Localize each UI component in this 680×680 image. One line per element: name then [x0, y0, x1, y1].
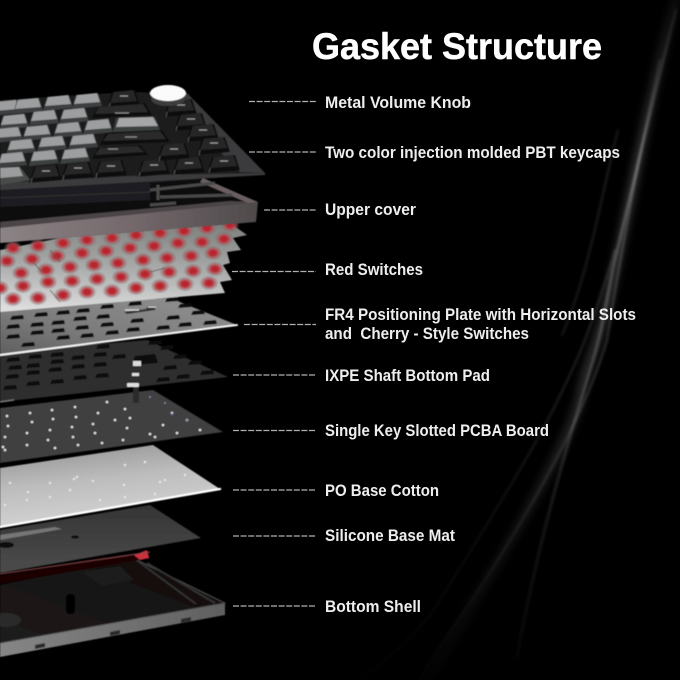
label: bottom shell: Bottom Shell: [325, 598, 421, 616]
layer: silicone base mat: [0, 505, 201, 584]
label: PCBA board: Single Key Slotted PCBA Board: [325, 422, 549, 440]
decorative smoke wisps: [360, 0, 676, 680]
layer: bottom shell: [0, 558, 225, 657]
label: metal volume knob: Metal Volume Knob: [325, 94, 471, 112]
label: FR4 positioning plate: [244, 306, 636, 343]
label: upper cover: Upper cover: [325, 201, 417, 219]
callout labels: [232, 94, 636, 616]
layer: PCBA board: [0, 390, 223, 463]
keys: grey alphas: [0, 93, 160, 185]
label: IXPE pad: IXPE Shaft Bottom Pad: [325, 367, 490, 385]
layer: keycaps and keyboard body: [0, 85, 265, 207]
label: red switches: Red Switches: [325, 261, 423, 279]
layer: IXPE pad: [0, 340, 228, 403]
label: silicone base mat: Silicone Base Mat: [325, 527, 455, 545]
icon: metal volume knob: [150, 85, 186, 106]
layer: upper cover: [0, 178, 258, 243]
label: FR4 positioning plate: and Cherry - Style Switches: [325, 325, 529, 343]
label: PO base cotton: PO Base Cotton: [325, 482, 439, 500]
layer: FR4 positioning plate: [0, 297, 237, 355]
label: keycaps: Two color injection molded PBT keycaps: [325, 144, 620, 162]
layer: red switches: [0, 218, 247, 312]
exploded keyboard layers: [0, 85, 265, 657]
layer: PO base cotton: [0, 445, 220, 527]
label: FR4 positioning plate: FR4 Positioning Plate with Horizontal Slots: [325, 306, 636, 324]
keys: dark modifiers: [29, 90, 240, 183]
title: Gasket Structure: [312, 26, 602, 67]
